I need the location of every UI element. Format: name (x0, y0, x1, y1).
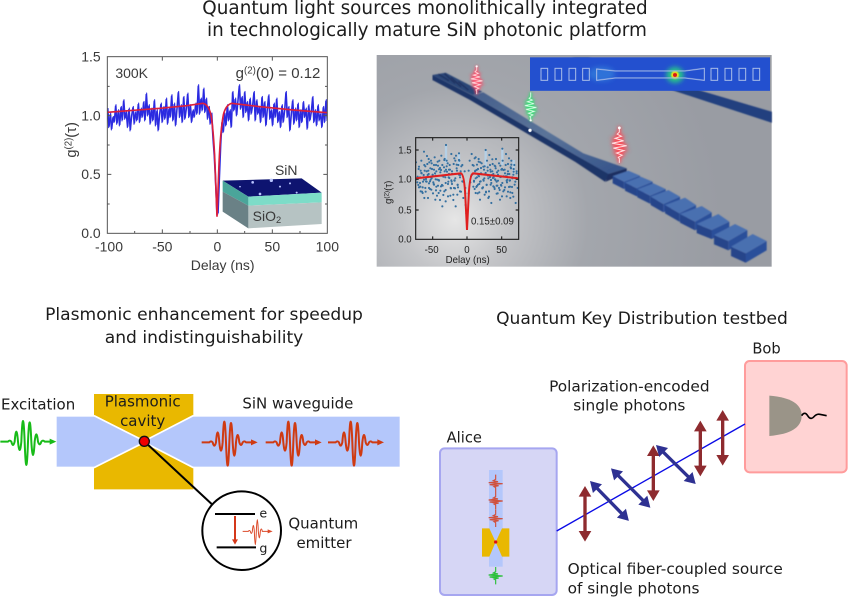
chart axis labels: Delay (ns) (191, 257, 255, 273)
labels: Plasmonic (105, 393, 181, 411)
chart axis labels: 300K (115, 65, 149, 81)
photon: green (525, 92, 536, 121)
chart axis labels: 1.5 (81, 49, 101, 65)
heading: plasmonic (45, 305, 363, 348)
chart axis labels: 100 (316, 238, 339, 254)
mini cavity chip (482, 470, 509, 584)
photon: red top (471, 65, 482, 94)
labels: cavity (120, 412, 165, 430)
emitted pulses (202, 422, 384, 466)
zoom line (144, 441, 212, 504)
labels: Excitation (1, 395, 75, 413)
heading: plasmonic: Plasmonic enhancement for speedup (45, 305, 363, 325)
scatter labels: 1.5 (398, 145, 412, 156)
panel: room-temperature g2 chart (63, 49, 339, 273)
scatter labels: 1.0 (398, 175, 412, 186)
panel: QKD testbed (440, 340, 847, 597)
inset: SiN on SiO2 chip (223, 162, 322, 228)
chart axis labels: 50 (265, 238, 280, 254)
scatter frame (416, 138, 519, 239)
labels: SiN waveguide (242, 394, 353, 412)
photon: red (612, 126, 627, 163)
labels: Bob (752, 340, 781, 357)
polarization arrows: vertical (579, 410, 729, 542)
chart axis labels: g (236, 65, 244, 82)
panel: SiN waveguide device render (377, 55, 772, 267)
chart axis labels: (0) = 0.12 (256, 65, 320, 82)
emitter level circle (202, 491, 281, 570)
Alice box (440, 448, 557, 595)
fiber (557, 424, 745, 531)
excitation pulse (0, 421, 56, 465)
scatter labels: g (384, 199, 395, 204)
grating teeth (613, 171, 767, 263)
chart axis labels: 0 (213, 238, 221, 254)
chart axis labels: -50 (152, 238, 173, 254)
second waveguide (background) (572, 57, 772, 123)
detector (769, 396, 827, 436)
labels: Polarization-encoded (549, 377, 710, 395)
polarization arrows: diagonal (585, 440, 700, 525)
inset: SiN on SiO2 chip: SiO (253, 208, 276, 224)
chart axis labels: 0.5 (81, 166, 101, 182)
labels: emitter (296, 534, 352, 552)
title: in technologically mature SiN photonic platform (207, 20, 647, 41)
labels (1, 393, 358, 552)
title (202, 0, 648, 41)
waveguide (432, 73, 627, 182)
panel: plasmonic cavity diagram (0, 393, 400, 570)
labels: Alice (447, 429, 482, 446)
gold bowtie (94, 394, 193, 489)
chart axis labels: (2) (244, 65, 256, 76)
chart axis labels: 0.0 (81, 225, 101, 241)
scatter fit curve (416, 173, 518, 230)
labels: Optical fiber-coupled source (568, 560, 783, 578)
scatter labels: (τ) (384, 181, 395, 191)
chart axis labels: (2) (63, 138, 74, 150)
SiN waveguide (57, 417, 400, 467)
inset: SiN on SiO2 chip: 2 (276, 215, 281, 225)
scatter labels: -50 (425, 245, 439, 256)
scatter points (415, 145, 519, 213)
heading: plasmonic: and indistinguishability (105, 328, 303, 348)
scatter labels (384, 145, 514, 266)
chart axis labels: 1.0 (81, 107, 101, 123)
scatter labels: Delay (ns) (446, 255, 490, 266)
labels: Quantum (288, 515, 358, 533)
chart noise trace (107, 85, 328, 214)
inset: g2 scatter chart (384, 138, 519, 266)
chart fit curve (107, 103, 327, 217)
labels: of single photons (568, 579, 699, 597)
scatter labels: 0.15±0.09 (471, 216, 514, 227)
Bob box (745, 361, 847, 472)
heading: QKD: Quantum Key Distribution testbed (496, 309, 788, 329)
emitter dot (528, 129, 532, 132)
chart axis labels: (τ) (64, 122, 80, 138)
scatter labels: 50 (496, 245, 507, 256)
inset: SiN on SiO2 chip: SiN (275, 162, 298, 178)
inset: cavity field map (530, 57, 770, 91)
emitter level circle: e (259, 506, 267, 521)
chart axis labels: -100 (95, 238, 123, 254)
labels (447, 340, 783, 597)
chart axis labels: g (64, 150, 80, 158)
scatter labels: 0.0 (398, 235, 412, 246)
chart axis labels (63, 49, 339, 273)
quantum emitter dot (139, 436, 149, 446)
scatter labels: 0 (464, 245, 470, 256)
chart frame and ticks (107, 57, 327, 233)
scatter labels: 0.5 (398, 205, 412, 216)
scatter labels: (2) (384, 191, 391, 199)
render background (377, 55, 772, 267)
labels: single photons (573, 397, 685, 415)
emitter level circle: g (259, 541, 267, 556)
